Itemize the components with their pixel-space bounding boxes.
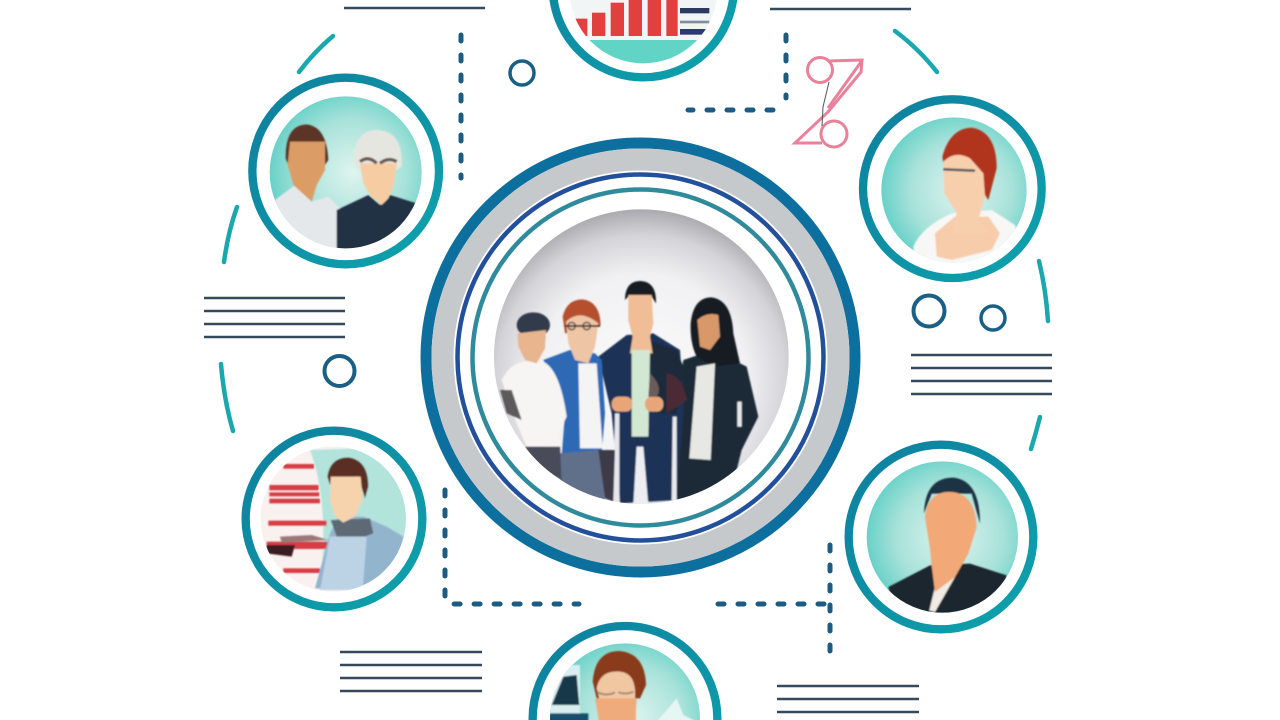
small ring: right large — [914, 296, 944, 326]
text placeholder lines: top right — [770, 8, 911, 10]
circle: top-right, woman with red hair — [863, 99, 1042, 278]
dashed connector: lower right — [710, 545, 830, 665]
text placeholder lines: top left — [344, 7, 485, 9]
dashed connector: upper left — [458, 35, 464, 178]
dashed connector: lower left — [445, 490, 579, 604]
right woman — [675, 350, 758, 500]
dashed connector: upper right — [688, 35, 786, 110]
icon: pink Z mark — [795, 58, 862, 147]
small ring: top — [510, 61, 534, 85]
circle: bottom-right, person in dark suit — [849, 445, 1033, 629]
text placeholder lines: bottom right — [777, 686, 919, 712]
bar chart — [575, 0, 678, 36]
circle: bottom, person with brown hair — [533, 626, 717, 720]
left person — [502, 362, 567, 447]
small ring: left — [324, 356, 354, 386]
small ring: right small — [981, 306, 1005, 330]
text placeholder lines: left — [204, 298, 345, 337]
hub team illustration — [494, 209, 789, 505]
hub rings — [426, 143, 855, 572]
circle: bottom-left, man with red stacks — [246, 431, 422, 607]
outer teal arc segments — [221, 31, 1048, 449]
text placeholder lines: right — [911, 355, 1052, 394]
infographic canvas — [204, 0, 1052, 720]
circle: top-left, two people — [252, 78, 439, 264]
circle: top, bar chart — [553, 0, 734, 77]
center man — [598, 333, 684, 503]
woman with blue jacket — [543, 350, 605, 457]
central hub — [426, 143, 855, 572]
text placeholder lines: bottom left — [340, 652, 482, 691]
